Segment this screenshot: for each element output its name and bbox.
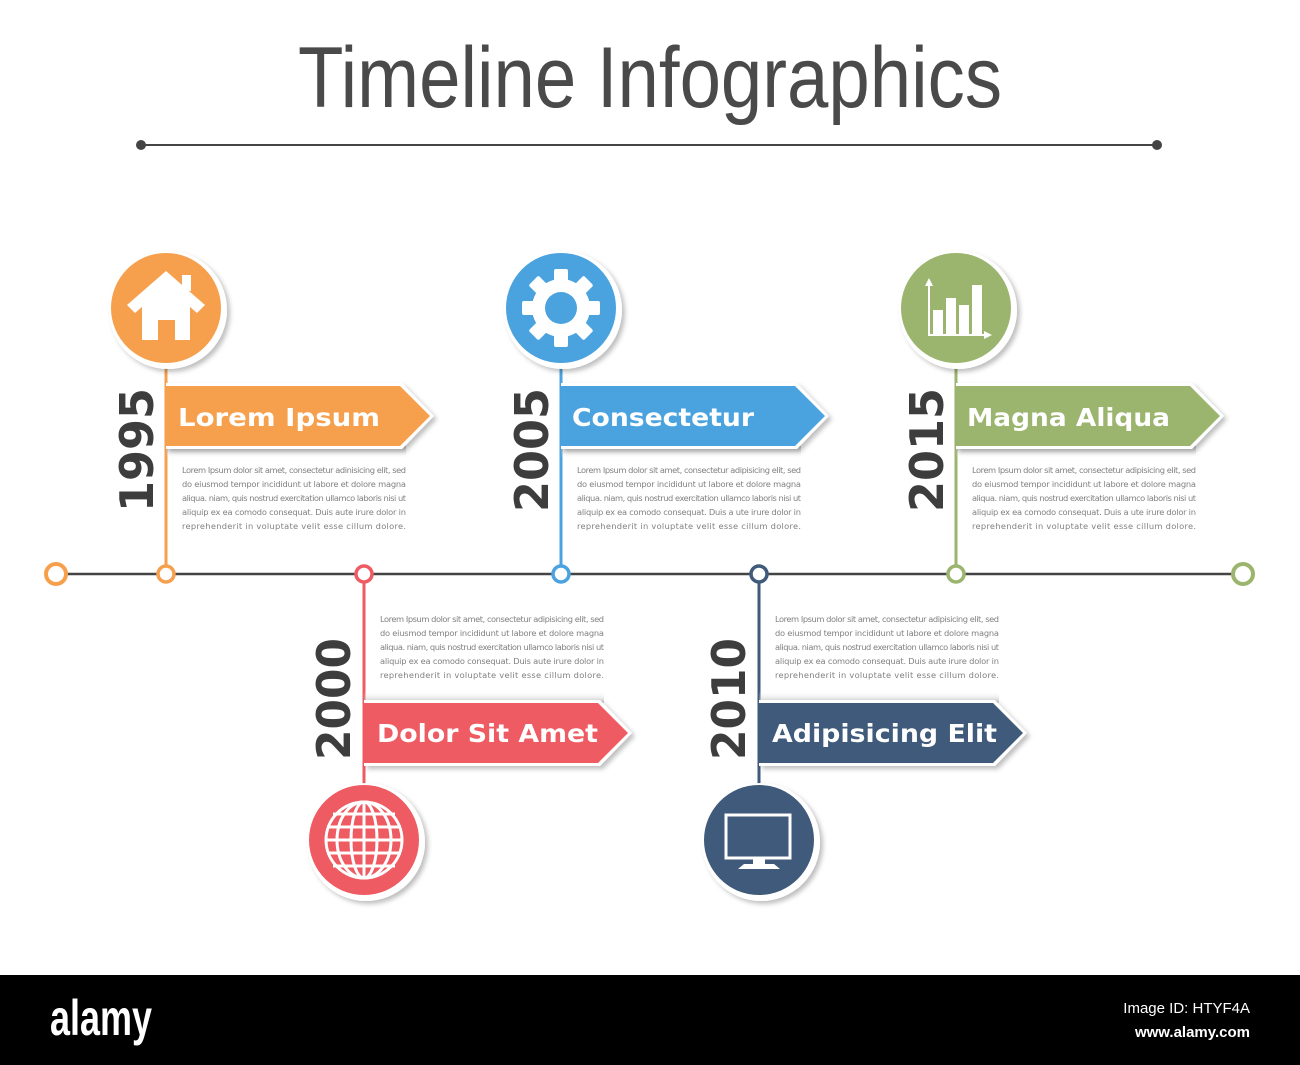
banner: Adipisicing Elit: Adipisicing Elit	[772, 719, 997, 748]
banner: Lorem Ipsum: Lorem Ipsum	[178, 403, 380, 432]
text block: reprehenderit in voluptate velit esse cillum dolore.	[577, 521, 801, 531]
item: 2000	[307, 566, 632, 901]
icon: house	[109, 251, 227, 369]
banner: Dolor Sit Amet: Dolor Sit Amet	[377, 719, 598, 748]
text block: reprehenderit in voluptate velit esse cillum dolore.	[775, 670, 999, 680]
text block: aliquip ex ea comodo consequat. Duis a ute irure dolor in	[577, 507, 801, 517]
footer logo: alamy	[50, 990, 152, 1046]
text block: aliqua. niam, quis nostrud exercitation ullamco laboris nisi ut	[972, 493, 1197, 503]
banner: Adipisicing Elit	[759, 691, 1027, 766]
text block: do eiusmod tempor incididunt ut labore et dolore magna	[380, 628, 604, 638]
text block: aliqua. niam, quis nostrud exercitation ullamco laboris nisi ut	[577, 493, 802, 503]
year: 2010: 2010	[702, 638, 756, 760]
text block: do eiusmod tempor incididunt ut labore et dolore magna	[577, 479, 801, 489]
year: 2000: 2000	[307, 638, 361, 760]
text block: aliqua. niam, quis nostrud exercitation ullamco laboris nisi ut	[775, 642, 1000, 652]
text block: aliquip ex ea comodo consequat. Duis aute irure dolor in	[182, 507, 406, 517]
text block: aliqua. niam, quis nostrud exercitation ullamco laboris nisi ut	[182, 493, 407, 503]
banner: Consectetur: Consectetur	[572, 403, 755, 432]
icon: globe	[307, 783, 425, 901]
year: 1995: 1995	[110, 388, 164, 512]
text block: aliqua. niam, quis nostrud exercitation ullamco laboris nisi ut	[380, 642, 605, 652]
text block: do eiusmod tempor incididunt ut labore et dolore magna	[972, 479, 1196, 489]
text block: do eiusmod tempor incididunt ut labore et dolore magna	[182, 479, 406, 489]
icon: bar chart	[899, 251, 1017, 369]
text block	[775, 614, 1000, 680]
title: Timeline Infographics	[298, 30, 1002, 126]
text block	[182, 465, 407, 531]
text block: reprehenderit in voluptate velit esse cillum dolore.	[972, 521, 1196, 531]
text block: aliquip ex ea comodo consequat. Duis aute irure dolor in	[380, 656, 604, 666]
item: 2010	[702, 566, 1027, 901]
item: 1995	[109, 251, 434, 582]
text block: Lorem Ipsum dolor sit amet, consectetur adipisicing elit, sed	[577, 465, 801, 475]
footer bar	[0, 975, 1300, 1065]
footer info: www.alamy.com	[1134, 1024, 1250, 1041]
item: 2005	[504, 251, 829, 582]
text block: aliquip ex ea comodo consequat. Duis aute irure dolor in	[775, 656, 999, 666]
text block: Lorem Ipsum dolor sit amet, consectetur adipisicing elit, sed	[972, 465, 1196, 475]
text block	[380, 614, 605, 680]
banner: Magna Aliqua: Magna Aliqua	[967, 403, 1170, 432]
banner: Dolor Sit Amet	[364, 691, 632, 766]
banner: Lorem Ipsum	[166, 383, 434, 458]
text block: aliquip ex ea comodo consequat. Duis a ute irure dolor in	[972, 507, 1196, 517]
item: 2015	[899, 251, 1224, 582]
banner: Magna Aliqua	[956, 383, 1224, 458]
icon: monitor	[702, 783, 820, 901]
timeline axis	[46, 564, 1253, 584]
text block: do eiusmod tempor incididunt ut labore et dolore magna	[775, 628, 999, 638]
footer info	[1123, 1000, 1250, 1041]
title underline	[136, 140, 1162, 150]
text block: Lorem Ipsum dolor sit amet, consectetur adinisicing elit, sed	[182, 465, 406, 475]
year: 2005: 2005	[505, 388, 559, 512]
text block	[577, 465, 802, 531]
text block: reprehenderit in voluptate velit esse cillum dolore.	[380, 670, 604, 680]
icon: gear	[504, 251, 622, 369]
text block: reprehenderit in voluptate velit esse cillum dolore.	[182, 521, 406, 531]
text block	[972, 465, 1197, 531]
text block: Lorem Ipsum dolor sit amet, consectetur adipisicing elit, sed	[380, 614, 604, 624]
year: 2015: 2015	[900, 388, 954, 512]
footer info: Image ID: HTYF4A	[1123, 1000, 1250, 1017]
banner: Consectetur	[561, 383, 829, 458]
text block: Lorem Ipsum dolor sit amet, consectetur adipisicing elit, sed	[775, 614, 999, 624]
